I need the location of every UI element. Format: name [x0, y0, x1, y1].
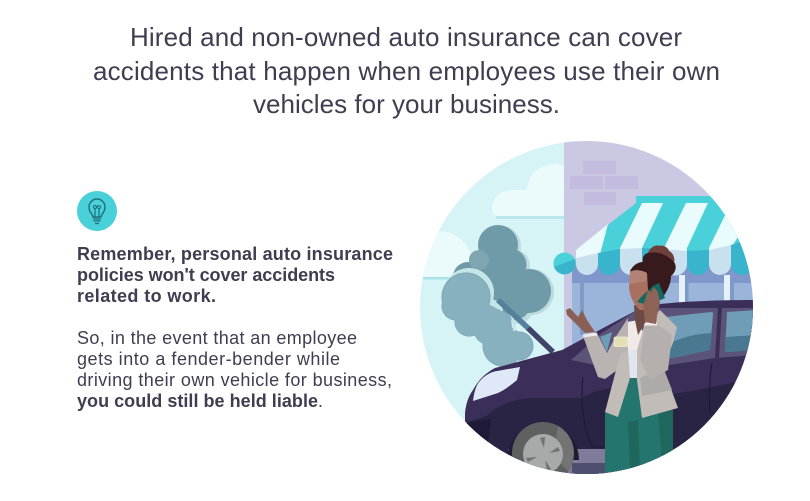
title — [93, 22, 720, 119]
sill — [508, 449, 674, 474]
woman on phone — [566, 245, 678, 490]
callout text: reminder: policies won't cover accidents — [77, 265, 335, 285]
jacket left panel — [605, 350, 630, 417]
hair — [630, 245, 676, 300]
trousers — [605, 378, 673, 473]
smoke: front — [442, 268, 534, 366]
face — [629, 270, 648, 310]
door seams — [582, 363, 712, 447]
jacket left sleeve — [583, 318, 628, 379]
callout text: reminder: Remember, personal auto insurance — [77, 244, 393, 264]
headlight — [473, 367, 520, 401]
awning — [554, 196, 762, 276]
body text: liability: driving their own vehicle for business, — [77, 370, 392, 390]
body text: liability: So, in the event that an employee — [77, 328, 357, 348]
illustration: broken-down car scene — [420, 141, 753, 474]
window 1 — [663, 312, 713, 360]
right forearm — [640, 324, 672, 380]
title: Hired and non-owned auto insurance can cover — [130, 22, 682, 52]
window 2 — [725, 310, 753, 352]
brick wall — [564, 141, 753, 443]
window frame — [571, 308, 757, 372]
body text: liability: gets into a fender-bender while — [77, 349, 340, 369]
storefront window — [572, 265, 762, 355]
body text: liability: . — [318, 391, 323, 411]
phone — [637, 283, 665, 305]
scallops — [576, 253, 598, 275]
car body — [465, 300, 753, 474]
window left of figure — [600, 332, 612, 352]
hood strut — [498, 300, 553, 352]
body text: liability: you could still be held liable — [77, 391, 318, 411]
icon: light bulb — [77, 191, 117, 231]
cloud: upper — [492, 164, 564, 219]
sky background — [420, 142, 564, 421]
shirt — [628, 320, 642, 378]
callout text: reminder — [77, 244, 393, 306]
neck — [634, 305, 646, 335]
front wheel — [508, 422, 579, 473]
smoke: back — [453, 225, 554, 324]
awning end ball — [554, 252, 576, 274]
lower body shadow — [466, 382, 736, 474]
cloud: left — [423, 231, 471, 280]
title: accidents that happen when employees use their own — [93, 56, 720, 86]
title: vehicles for your business. — [253, 89, 560, 119]
callout text: reminder: related to work. — [77, 286, 216, 306]
jacket right panel — [637, 310, 678, 418]
left hand — [566, 308, 595, 333]
phone hand — [643, 287, 660, 324]
body text: liability — [77, 328, 392, 411]
name badge — [614, 337, 628, 346]
